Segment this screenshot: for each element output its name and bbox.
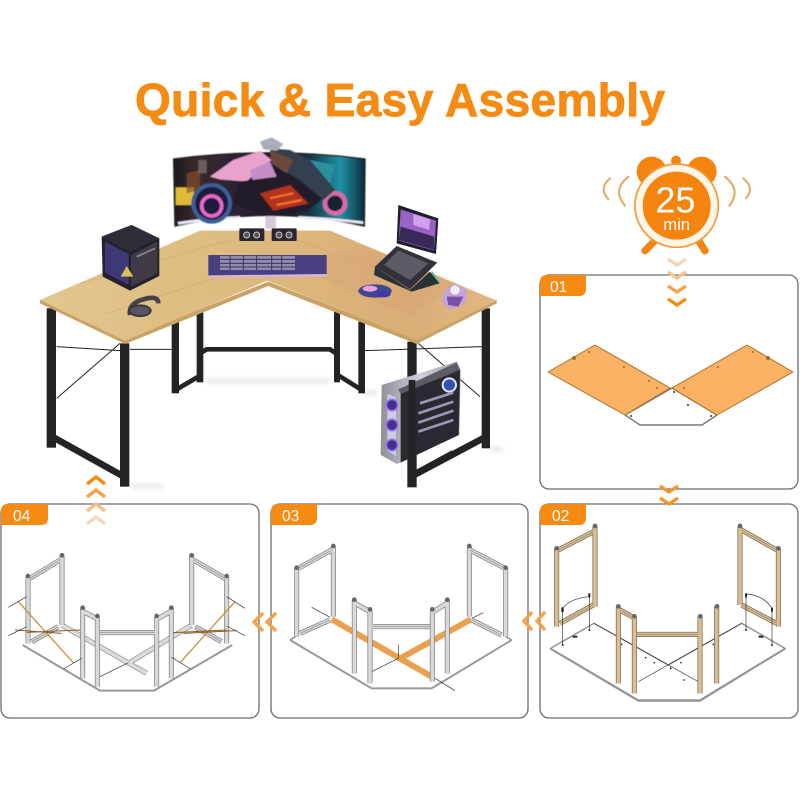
desktop surface [40,231,497,344]
arrow: step 04 to finished desk [87,477,105,524]
board diagram [548,345,793,425]
step tag 04 [1,504,48,525]
headphones [129,298,158,316]
keyboard and mat [208,255,327,277]
frame install diagram [551,524,785,701]
arrow: clock to step 01 [668,259,686,305]
title: Quick & Easy Assembly [135,74,665,126]
step tag 01 [540,275,586,296]
speakers [239,228,297,241]
front leg over tower [412,380,453,487]
cross bar diagram [290,544,512,691]
step tag 04: 04 [13,508,31,525]
panel 02 [540,504,798,718]
vibration marks [604,177,750,206]
step tag 02 [540,504,586,525]
monitor [174,137,365,229]
figurine [443,283,467,310]
arrow: step 02 to step 03 [524,612,545,630]
step tag 03: 03 [282,508,299,525]
arrow: step 01 to step 02 [660,486,678,504]
desk illustration [40,137,503,488]
3D printer cube [102,225,159,291]
arrow: step 03 to step 04 [254,613,276,631]
clock time text: 25 [655,179,695,220]
cross cable diagram [8,553,245,691]
bells and feet [637,156,717,251]
panel 01 [540,275,798,489]
mouse pad [358,284,392,298]
panel 04 [1,504,259,718]
desk legs and rails [47,308,490,487]
step tag 02: 02 [552,508,569,525]
laptop on stand [374,205,440,292]
PC tower [381,362,461,487]
clock time text: min [663,215,690,234]
alarm clock badge [604,156,750,251]
step tag 03 [271,504,317,525]
step tag 01: 01 [550,279,567,296]
panel 03 [271,504,528,718]
